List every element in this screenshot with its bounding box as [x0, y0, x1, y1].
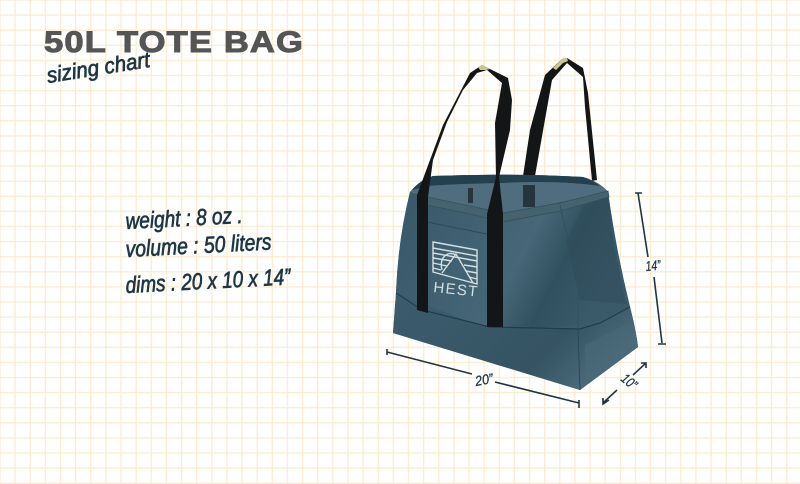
bag interior: [410, 175, 608, 214]
pocket edge: [427, 222, 487, 234]
logo: [433, 242, 477, 284]
spec: weight: weight : 8 oz .: [125, 202, 243, 234]
back handle: [523, 58, 597, 181]
bag body: [396, 192, 630, 330]
inner loop tabs: [468, 185, 535, 207]
side seam and shadow: [566, 197, 626, 304]
dimension: depth 10 inches: 10”: [618, 370, 641, 393]
specs text block: [125, 202, 292, 298]
dimension: width 20 inches: [387, 349, 579, 408]
bag base: [393, 293, 638, 390]
dimension: height 14 inches: [635, 193, 666, 344]
spec: volume: volume : 50 liters: [125, 228, 272, 262]
bag rim: [427, 191, 609, 222]
dimension: depth 10 inches: [603, 363, 646, 404]
logo wordmark: HEST: [433, 279, 478, 301]
subtitle: sizing chart: [45, 47, 152, 88]
dimension: height 14 inches: 14”: [645, 257, 662, 274]
front handle: [417, 65, 512, 327]
tote bag illustration: [393, 58, 638, 390]
bag silhouette: [393, 175, 638, 390]
title: 50L TOTE BAG: [44, 26, 304, 59]
spec: dimensions: dims : 20 x 10 x 14”: [125, 263, 292, 298]
dimension: width 20 inches: 20”: [473, 370, 495, 389]
